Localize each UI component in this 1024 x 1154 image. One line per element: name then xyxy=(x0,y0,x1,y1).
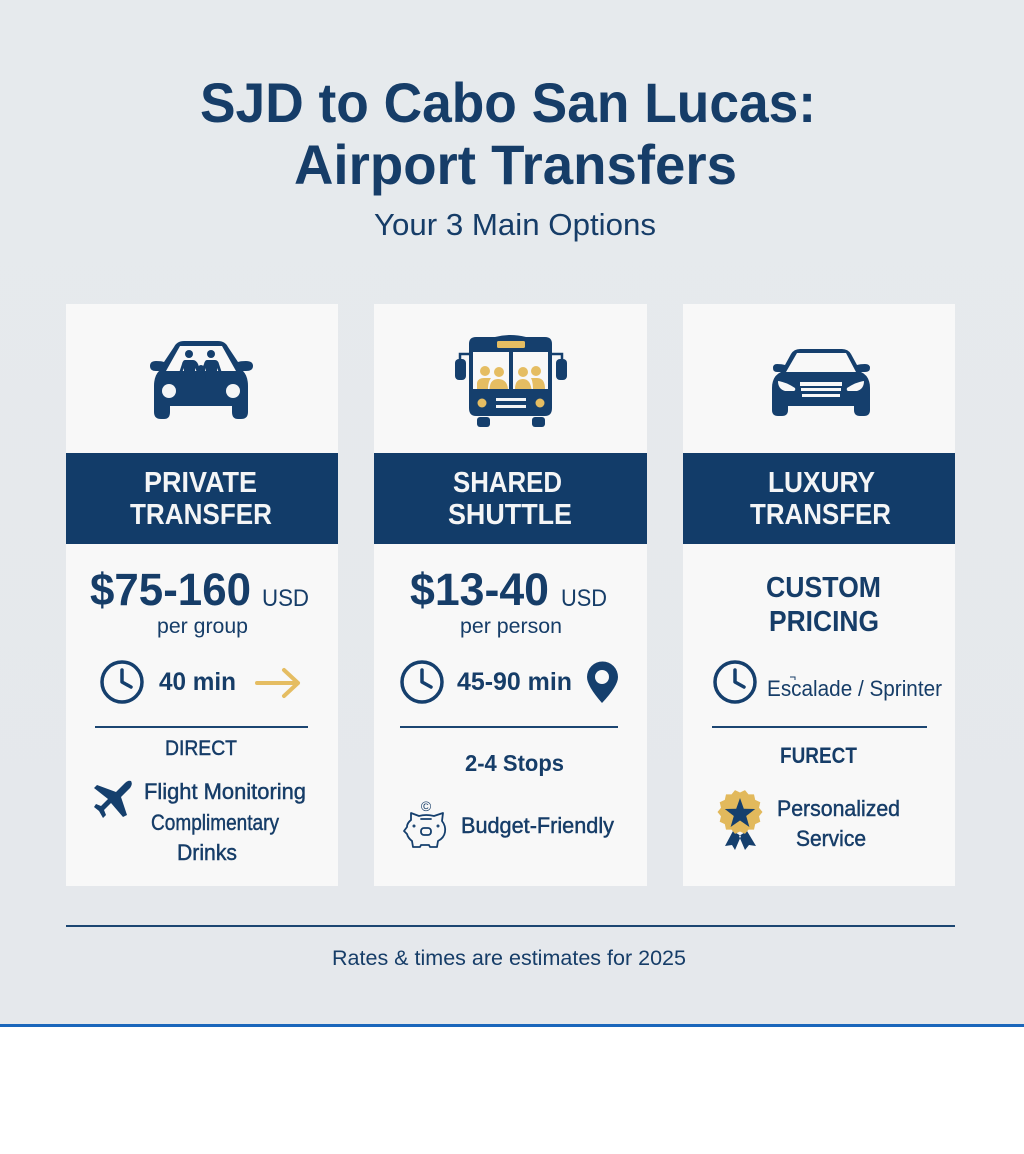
band: private transfer heading: TRANSFER xyxy=(130,499,272,531)
price: $75-160 xyxy=(90,564,251,615)
features: Drinks xyxy=(177,840,237,865)
feature: budget friendly: Budget-Friendly xyxy=(461,813,614,838)
subtitle: Your 3 Main Options xyxy=(374,207,656,242)
features: Service xyxy=(796,826,866,851)
band: shared shuttle heading: SHUTTLE xyxy=(448,499,572,531)
vehicles: Escalade / Sprinter xyxy=(767,676,942,701)
title: SJD to Cabo San Lucas: xyxy=(200,71,816,134)
price xyxy=(410,564,607,638)
icon: piggy bank: © xyxy=(421,798,432,814)
icon: rosette xyxy=(718,790,762,850)
price: per person xyxy=(460,615,562,638)
icon: clock xyxy=(102,662,142,702)
panel: luxury transfer xyxy=(683,304,955,886)
features: Personalized xyxy=(777,796,900,821)
custom pricing: CUSTOM xyxy=(766,572,881,604)
custom pricing xyxy=(766,572,881,638)
band: shared shuttle heading: SHARED xyxy=(453,467,562,499)
band: luxury transfer heading: TRANSFER xyxy=(750,499,891,531)
band: luxury transfer heading xyxy=(683,453,955,544)
icon: location pin xyxy=(587,662,618,703)
label: direct: DIRECT xyxy=(165,737,237,760)
duration: 45-90 min xyxy=(457,668,572,696)
features: Complimentary xyxy=(151,810,279,835)
price: per group xyxy=(157,615,248,638)
icon: clock xyxy=(715,662,755,702)
price: $13-40 xyxy=(410,564,549,615)
panel: shared shuttle xyxy=(374,304,647,886)
price xyxy=(90,564,309,638)
features xyxy=(777,796,900,851)
band: private transfer heading xyxy=(66,453,338,544)
title: Airport Transfers xyxy=(294,133,737,196)
icon: clock xyxy=(402,662,442,702)
bottom blue rule xyxy=(0,1024,1024,1027)
title xyxy=(200,71,816,196)
duration: 40 min xyxy=(159,668,236,696)
footer note: Rates & times are estimates for 2025 xyxy=(332,947,686,970)
icon: bus xyxy=(455,335,567,427)
icon: airplane xyxy=(94,781,132,818)
label: furect: FURECT xyxy=(780,743,857,768)
features: Flight Monitoring xyxy=(144,779,306,804)
label: stops: 2-4 Stops xyxy=(465,750,564,776)
band: private transfer heading: PRIVATE xyxy=(144,467,257,499)
icon: car with family xyxy=(150,341,253,419)
icon: arrow xyxy=(257,670,298,696)
band: luxury transfer heading: LUXURY xyxy=(768,467,875,499)
price: USD xyxy=(561,585,607,612)
features xyxy=(144,779,306,865)
price: USD xyxy=(262,585,309,612)
panel: private transfer xyxy=(66,304,338,886)
icon: piggy bank xyxy=(404,798,445,847)
custom pricing: PRICING xyxy=(769,606,879,638)
band: shared shuttle heading xyxy=(374,453,647,544)
icon: luxury car xyxy=(772,349,870,416)
